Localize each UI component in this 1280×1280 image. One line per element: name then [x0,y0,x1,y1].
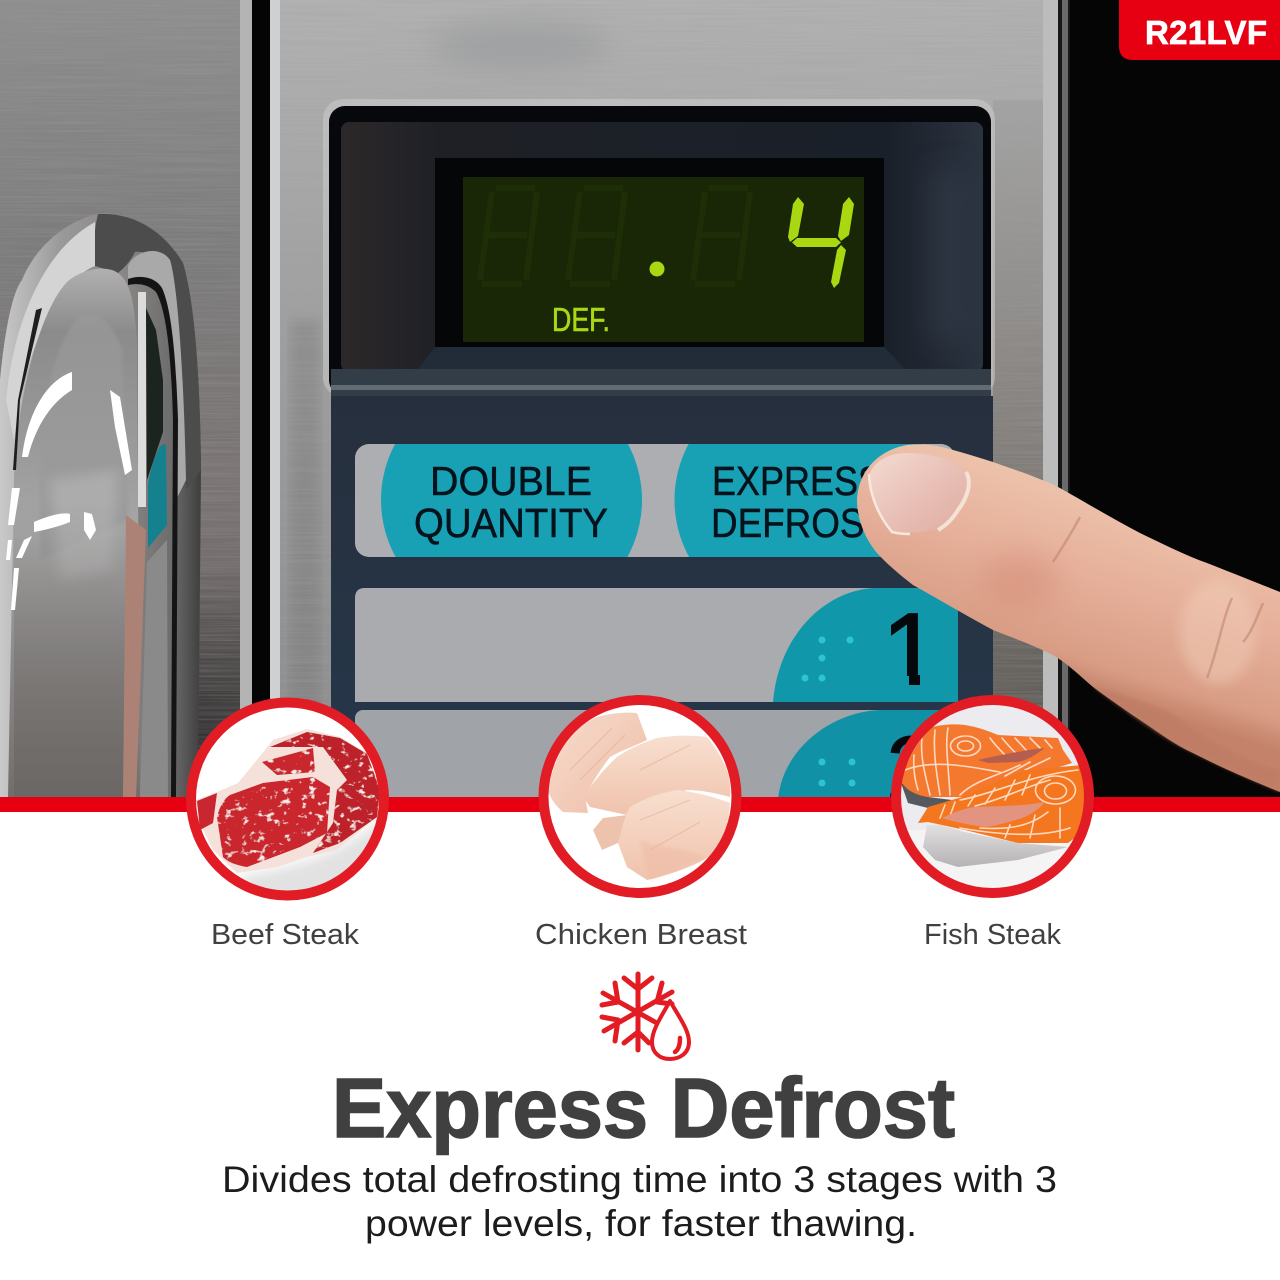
chicken fillet back [548,713,647,813]
chicken ring [544,700,736,893]
silver skin [923,825,1068,867]
model tag [1119,0,1280,60]
lip band [331,369,991,396]
black door gap [252,0,270,704]
row 1 braille [802,636,854,682]
table lower highlight [895,830,1095,900]
upper slit [978,748,1045,763]
icon: snowflake with water drop [602,974,689,1059]
lower steak [918,765,1092,843]
right edge highlight [1043,0,1058,797]
fish backdrop [896,700,1090,894]
row 2 braille [818,758,856,786]
express defrost label: EXPRESS [712,458,882,504]
food photo: chicken breast [543,700,737,894]
row 1 numeral: 1 [882,592,939,707]
handle lower reflection grey [140,540,168,797]
handle outer arch [0,213,201,797]
handle left shadow edge [13,308,42,470]
row 1 silver [355,588,958,702]
double quantity label [414,458,608,546]
description text [222,1159,1057,1244]
chicken fillet front [618,790,730,880]
snowflake [602,974,672,1050]
handle inner dome rings [44,327,120,536]
steel control panel [280,0,1043,708]
bezel body [341,122,983,372]
lip highlight [331,385,991,390]
digit 4 [788,197,854,288]
handle top dark reflection [94,214,201,490]
handle left sheen [6,222,95,440]
keypad background [331,396,993,797]
label: chicken breast: Chicken Breast [535,919,747,951]
beef left muscle [197,793,217,830]
door lower right shade [198,586,240,750]
steel door [0,0,250,797]
LCD recess [435,158,884,347]
express defrost label: DEFROST [711,500,887,546]
dark microwave edge [1058,0,1070,797]
knuckle light patch [1180,580,1256,684]
steak slit [942,802,1045,827]
specular highlights [6,372,132,610]
chicken fillet small [593,815,627,850]
lower ledge [418,347,905,369]
food photo: beef steak [190,702,390,900]
water drop [652,1001,689,1059]
finger red pressure spot [982,552,1058,608]
upper steak [902,724,1072,797]
handle dark seam [128,277,178,797]
brushed metal texture [0,164,1043,750]
label: fish steak: Fish Steak [924,919,1061,951]
handle bright strip [138,292,146,507]
row 2 numeral: 2 [886,718,937,820]
handle side black strip [146,308,163,480]
bezel black frame [329,106,991,396]
row 2 teal key [778,710,958,800]
beef right muscle [270,732,380,853]
handle right lobe [128,251,186,500]
label: beef steak: Beef Steak [211,919,360,951]
double quantity label: QUANTITY [414,500,608,546]
panel top dark reflection [444,22,597,66]
bezel side glow right [935,184,954,327]
bezel outer silver rim [323,99,995,397]
strip silver [355,444,955,557]
fingernail [868,453,968,533]
beef main muscle [217,777,330,867]
red divider bar [0,797,1280,812]
photo: microwave control panel close-up [0,0,1280,820]
chicken fillet middle [583,736,730,815]
beef fat base [196,729,380,873]
button row 2 [355,710,958,820]
drop highlight [675,1038,680,1052]
display bezel [323,99,995,397]
right steel column [993,100,1043,708]
nail left rim [869,474,910,534]
knuckle creases [1053,517,1263,678]
beef backdrop [190,702,384,896]
black microwave window [1070,0,1280,797]
fish ring [896,700,1089,893]
door handle [0,213,201,797]
panel left edge [270,0,280,699]
lower edge shadow [1093,687,1280,792]
cuticle [938,472,969,530]
finger shape [857,444,1280,792]
description text: power levels, for faster thawing. [365,1203,917,1244]
button strip: double quantity and express defrost [355,376,955,624]
fish dark skin [901,783,952,808]
food photo: fish steak [895,700,1095,900]
DEF indicator: DEF. [552,301,610,338]
row 2 silver [355,710,958,810]
colon dot [650,262,664,276]
dome reflection column [50,470,118,580]
handle skin-coloured reflection [123,515,146,797]
title: Express Defrost [332,1061,955,1155]
beef top muscle [262,748,315,775]
teal buttons [381,376,936,624]
tag background [1119,0,1280,60]
LCD screen [463,177,864,342]
microwave edge line [1062,0,1068,797]
button row 1 [355,588,958,707]
upper steak stripes [905,728,1052,795]
chicken fibres [570,728,700,850]
door edge strip [240,0,252,710]
panel left column [290,320,320,702]
lower dome brushed area [14,544,126,785]
handle inner dome [8,269,140,797]
row 1 teal key [773,588,958,702]
handle teal reflection [148,444,167,548]
ghost digits [480,188,750,284]
beef ring [191,702,384,896]
express defrost label [711,458,887,546]
double quantity label: DOUBLE [430,458,592,504]
tag text: R21LVF [1145,14,1267,51]
description text: Divides total defrosting time into 3 stages with 3 [222,1159,1057,1200]
finger pressing the button [857,444,1280,792]
beef shadow [240,815,390,900]
lower steak stripes [940,770,1078,838]
chicken backdrop [543,700,737,894]
chicken shade [640,840,706,880]
row 1 numeral stem base [909,675,920,685]
